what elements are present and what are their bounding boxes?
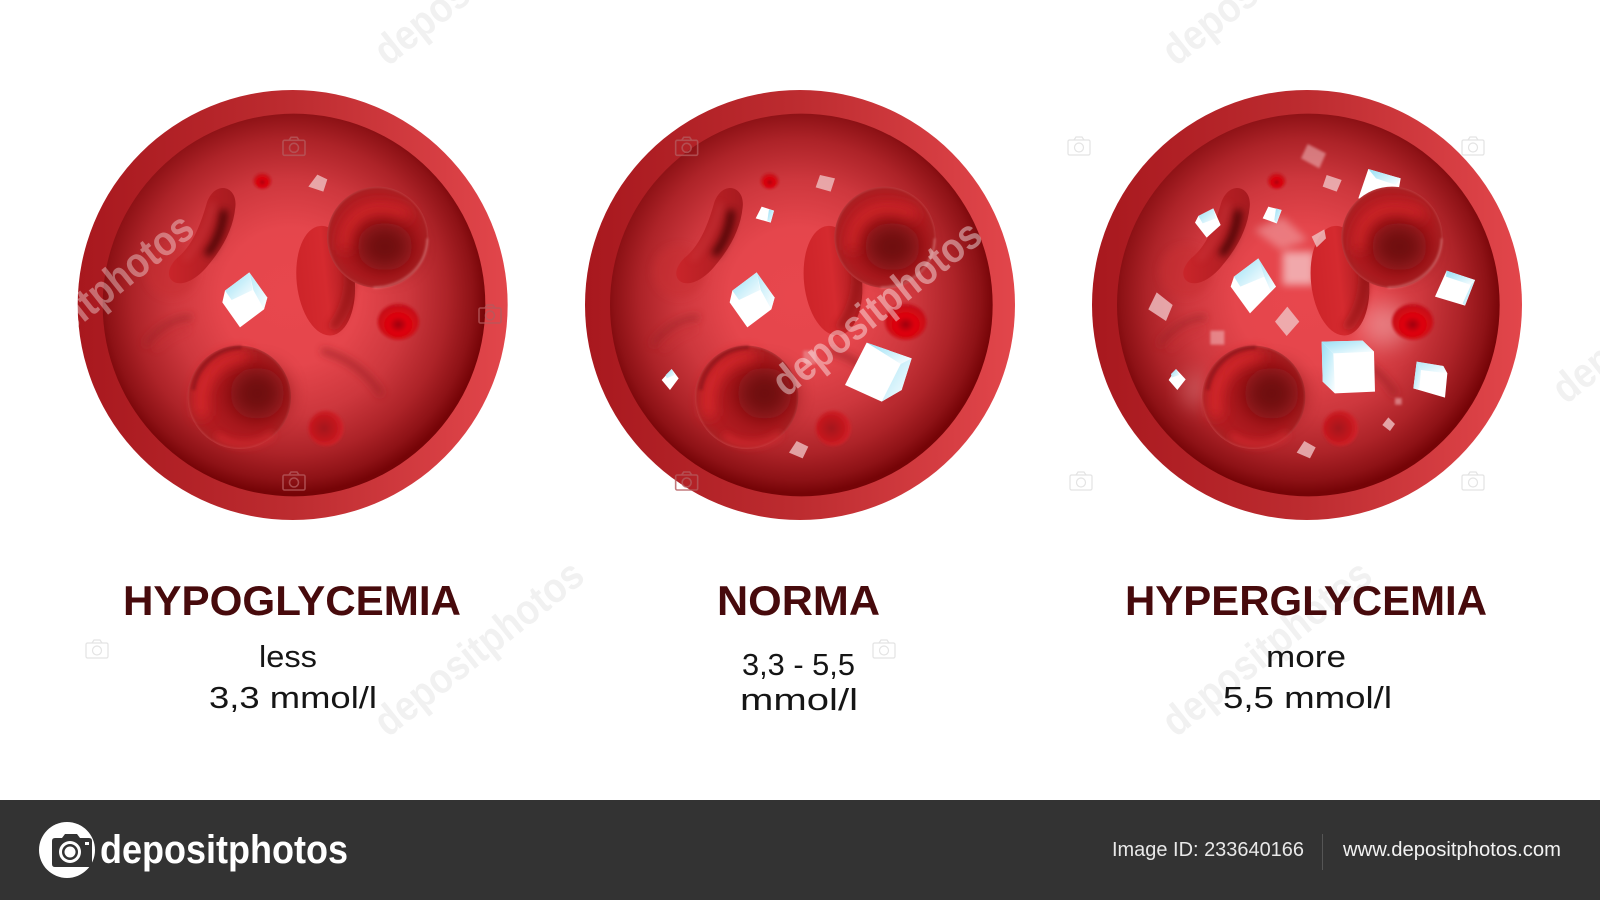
footer bar: [0, 800, 1600, 900]
watermarks on white background: depositphotos: [1152, 550, 1380, 745]
website url: www.depositphotos.com: [1342, 839, 1561, 861]
watermarks on white background: depositphotos: [364, 550, 592, 745]
text: norma range: 3,3 - 5,5: [742, 647, 855, 682]
logo wordmark: depositphotos: [100, 828, 348, 872]
sugar cube: small left: [662, 369, 679, 390]
text: hypoglycemia range: 3,3 mmol/l: [209, 680, 377, 715]
watermark camera icons: [283, 137, 501, 490]
text: norma range: [740, 647, 858, 717]
text: hyperglycemia range: 5,5 mmol/l: [1223, 680, 1392, 715]
text: norma range: mmol/l: [740, 682, 858, 717]
panel: hypoglycemia vessel: [78, 90, 508, 520]
heading: hyperglycemia: HYPERGLYCEMIA: [1125, 577, 1487, 624]
sugar cubes: faint: [1148, 175, 1395, 458]
red blood cell: upper: [1341, 187, 1443, 288]
text: hypoglycemia range: less: [259, 639, 317, 674]
watermark: centre: depositphotos: [762, 210, 990, 405]
panel: norma vessel: [585, 90, 1015, 520]
watermark camera icons: [86, 137, 1484, 658]
faint sugar cube: [308, 175, 327, 192]
image id: Image ID: 233640166: [1112, 839, 1304, 861]
heading: norma: NORMA: [717, 577, 880, 624]
sugar cube: small top: [756, 207, 774, 223]
sugar cube: large: [845, 343, 912, 402]
vessel ring and lumen: [585, 90, 1015, 520]
sugar cube: behind upper cell: [1358, 169, 1401, 202]
faint sugar cubes: [789, 175, 835, 458]
vessel ring and lumen: [78, 90, 508, 520]
text: hyperglycemia range: more: [1266, 639, 1346, 674]
watermarks on white background: [364, 0, 1600, 745]
red blood cells: [169, 173, 428, 449]
text: hypoglycemia range: [209, 639, 377, 715]
sugar cubes: bright: [1169, 207, 1475, 398]
vessel ring and lumen: [1092, 90, 1522, 520]
icon: camera logo: [39, 822, 95, 878]
blurred background sugar: [1186, 144, 1408, 407]
sugar cube: [222, 272, 267, 327]
panel: hyperglycemia vessel: [1092, 90, 1522, 520]
text: hyperglycemia range: [1223, 639, 1392, 715]
heading: hypoglycemia: HYPOGLYCEMIA: [123, 577, 461, 624]
red blood cells: [1183, 173, 1433, 449]
red blood cells: [676, 173, 936, 449]
sugar cube: centre: [730, 272, 775, 327]
watermark camera icons: [676, 137, 698, 490]
